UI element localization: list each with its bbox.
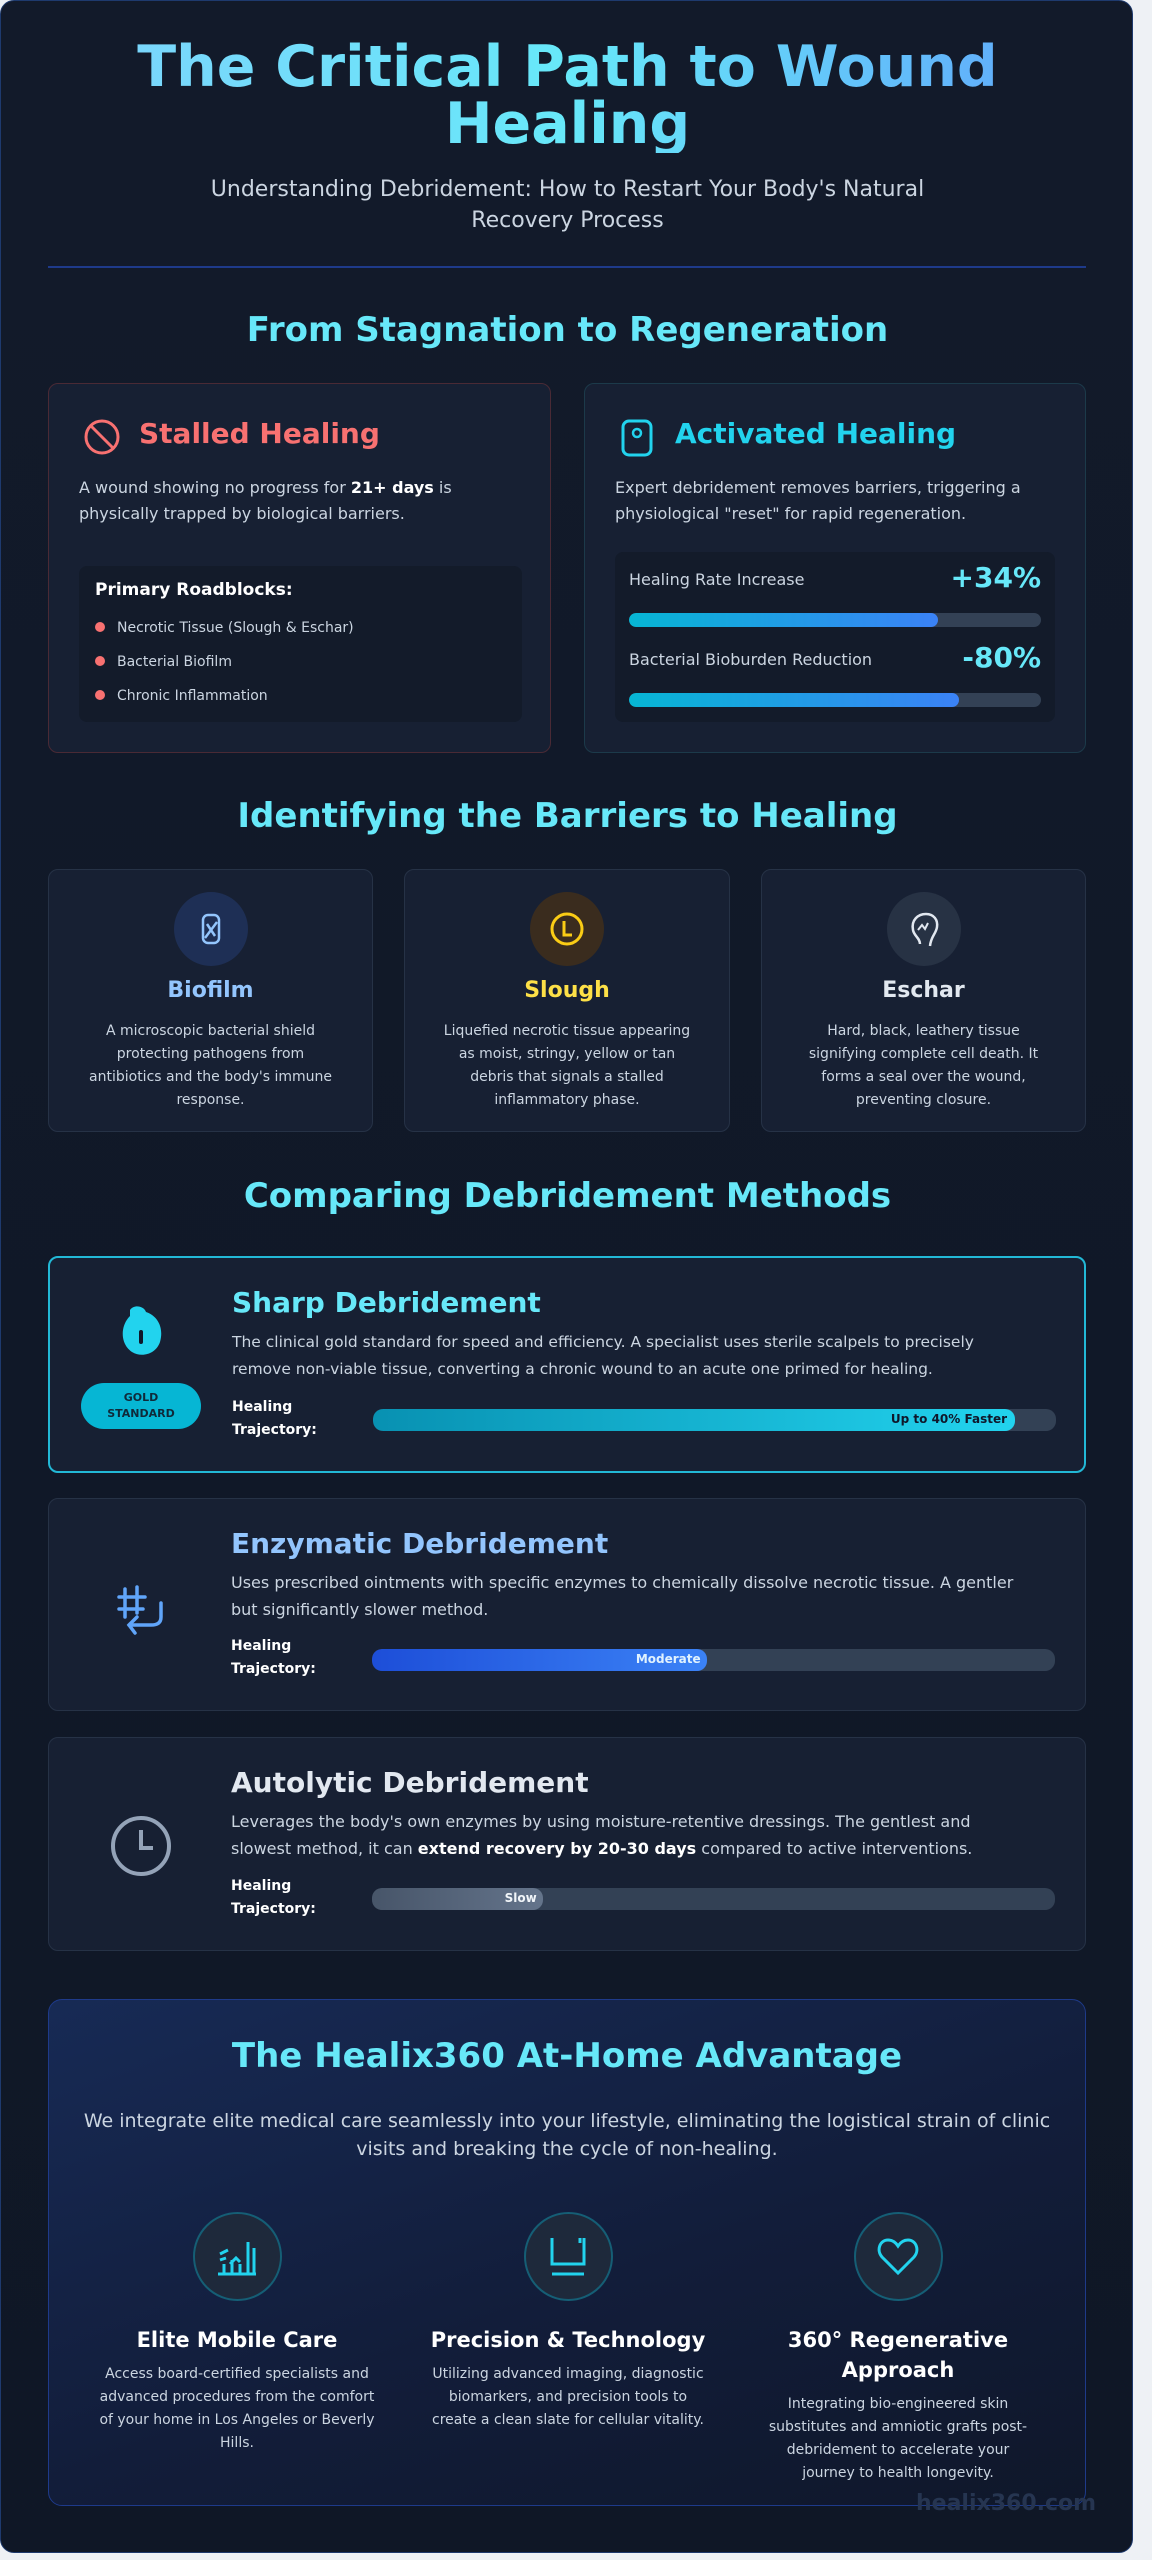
panel: eschar: Hard, black, leathery tissue signifying complete cell death. It forms a seal over the wound, preventing closure. (809, 1023, 1038, 1108)
heading: from stagnation: From Stagnation to Regeneration (247, 310, 888, 350)
icon: no sign (84, 420, 120, 454)
text: A wound showing no progress for 21+ days is physically trapped by biological barriers. (79, 478, 452, 523)
panel: sharp debridement: Sharp Debridement (232, 1286, 541, 1319)
panel: sharp debridement: The clinical gold standard for speed and efficiency. A specialist uses sterile scalpels to precisely remove non-viable tissue, converting a chronic wound to an acute one primed for healing. (232, 1333, 974, 1378)
feature: elite mobile care: Elite Mobile Care (137, 2328, 337, 2352)
heading: advantage: The Healix360 At-Home Advantage (232, 2036, 902, 2076)
feature: precision technology (431, 2212, 705, 2428)
panel: sharp debridement: Trajectory: (232, 1422, 317, 1438)
feature: elite mobile care (99, 2212, 375, 2451)
icon: slough (530, 892, 604, 966)
panel: enzymatic debridement: Enzymatic Debridement (231, 1527, 608, 1560)
icon: chart (192, 2212, 282, 2301)
text: Expert debridement removes barriers, triggering a physiological "reset" for rapid regeneration. (615, 478, 1021, 523)
roadblocks box: Chronic Inflammation (117, 688, 268, 704)
feature: precision technology: Precision & Technology (431, 2328, 705, 2352)
panel: eschar: Eschar (882, 978, 965, 1003)
roadblocks box: Primary Roadblocks: (95, 580, 293, 600)
panel: enzymatic debridement: Healing (231, 1638, 291, 1654)
bar: autolytic: Slow (505, 1891, 537, 1905)
feature: regenerative: 360° Regenerative Approach (788, 2328, 1008, 2382)
metrics box: +34% (951, 561, 1041, 594)
panel: stalled healing (48, 383, 551, 753)
roadblocks box (79, 566, 522, 722)
panel: enzymatic debridement: Trajectory: (231, 1661, 316, 1677)
panel: autolytic debridement (48, 1737, 1086, 1951)
bar: sharp (373, 1409, 1056, 1431)
bar: sharp: Up to 40% Faster (891, 1412, 1007, 1426)
icon: eschar (886, 892, 960, 966)
metrics box (615, 552, 1055, 722)
panel: enzymatic debridement (48, 1498, 1086, 1711)
heading: stalled: Stalled Healing (139, 417, 380, 450)
panel: autolytic debridement: Healing (231, 1878, 291, 1894)
heading: activated: Activated Healing (675, 417, 956, 450)
panel: activated healing (584, 383, 1086, 753)
feature: precision technology: Utilizing advanced imaging, diagnostic biomarkers, and precision tools to create a clean slate for cellular vitality. (432, 2366, 704, 2428)
panel: enzymatic debridement: Uses prescribed ointments with specific enzymes to chemically dissolve necrotic tissue. A gentler but significantly slower method. (231, 1573, 1013, 1619)
icon: enzyme (117, 1585, 163, 1635)
panel: sharp debridement: Healing (232, 1399, 292, 1415)
panel: autolytic debridement: Trajectory: (231, 1901, 316, 1917)
panel: slough: Slough (524, 978, 610, 1003)
roadblocks box: Necrotic Tissue (Slough & Eschar) (117, 620, 354, 636)
bar: enzymatic (372, 1649, 1055, 1671)
icon: tray (524, 2212, 612, 2301)
feature: regenerative: Integrating bio-engineered skin substitutes and amniotic grafts post-debridement to accelerate your journey to health longevity. (769, 2396, 1027, 2481)
panel: biofilm: A microscopic bacterial shield protecting pathogens from antibiotics and the body's immune response. (89, 1023, 332, 1108)
panel: biofilm (48, 869, 373, 1132)
feature: elite mobile care: Access board-certified specialists and advanced procedures from the comfort of your home in Los Angeles or Beverly Hills. (99, 2366, 375, 2451)
panel: slough (404, 869, 730, 1132)
icon: heart (854, 2212, 942, 2301)
panel: biofilm: Biofilm (167, 978, 254, 1003)
icon: clock (111, 1816, 171, 1876)
panel: eschar (761, 869, 1086, 1132)
metrics box: -80% (962, 641, 1041, 674)
panel: healix360 advantage (48, 1999, 1086, 2506)
roadblocks box: Bacterial Biofilm (117, 654, 232, 670)
badge: gold standard: GOLD (124, 1391, 158, 1404)
badge: gold standard (81, 1383, 201, 1429)
panel: autolytic debridement: Leverages the body's own enzymes by using moisture-retentive dressings. The gentlest and slowest method, it can extend recovery by 20-30 days compared to active interventions. (231, 1812, 972, 1858)
heading: barriers: Identifying the Barriers to Healing (237, 796, 898, 836)
bar: enzymatic: Moderate (636, 1652, 701, 1666)
badge: gold standard: STANDARD (107, 1407, 175, 1420)
title: The Critical Path to Wound Healing (137, 34, 998, 157)
panel: autolytic debridement: Autolytic Debridement (231, 1766, 589, 1799)
icon: device (622, 420, 652, 456)
metrics box: Bacterial Bioburden Reduction (629, 650, 872, 669)
icon: scalpel drop (122, 1306, 162, 1355)
feature: regenerative (769, 2212, 1027, 2481)
panel: slough: Liquefied necrotic tissue appearing as moist, stringy, yellow or tan debris that signals a stalled inflammatory phase. (444, 1023, 690, 1108)
heading: methods: Comparing Debridement Methods (244, 1176, 891, 1216)
subtitle: Understanding Debridement: How to Restart Your Body's Natural Recovery Process (211, 177, 924, 233)
watermark: healix360.com (916, 2491, 1096, 2516)
metrics box: Healing Rate Increase (629, 570, 804, 589)
icon: biofilm (174, 892, 248, 966)
panel: sharp debridement (48, 1256, 1086, 1473)
intro text: We integrate elite medical care seamlessly into your lifestyle, eliminating the logistical strain of clinic visits and breaking the cycle of non-healing. (84, 2110, 1050, 2160)
bar: autolytic (372, 1888, 1055, 1910)
